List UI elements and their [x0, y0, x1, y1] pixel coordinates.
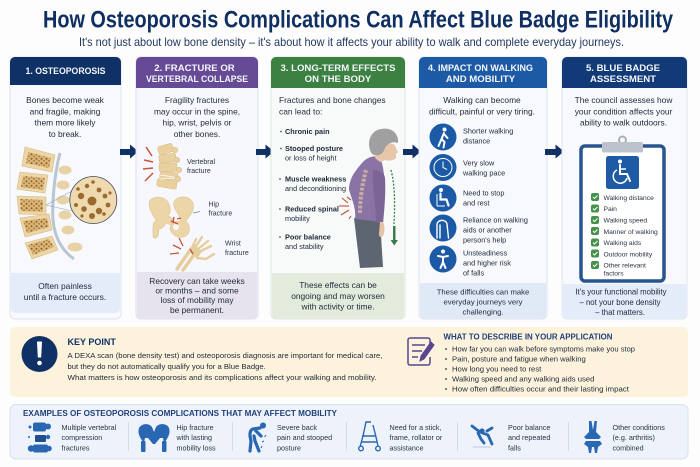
text: hip fracture: with lasting: [176, 433, 212, 442]
callout: these difficulties: everyday journeys very: [443, 298, 523, 306]
callout: functional mobility: – not your bone density: [579, 298, 661, 307]
icon: knee joint: [584, 421, 602, 453]
panel: 1. osteoporosis: [10, 57, 121, 319]
text: multiple vertebral: fractures: [62, 444, 90, 452]
text: reliance on walking aids: [463, 216, 528, 244]
list: effects: [279, 127, 346, 251]
text: key point body: A DEXA scan (bone density test) and osteoporosis diagnosis are important for medical care,: [68, 351, 383, 360]
list: what to describe: How far you can walk before symptoms make you stop: [452, 344, 635, 354]
heading: blue badge assessment: [562, 57, 687, 88]
text: other conditions: Other conditions: [612, 423, 665, 432]
panel: 4. impact on walking: [419, 57, 547, 319]
text: severe back pain: pain and stooped: [277, 433, 332, 442]
heading: what to describe: WHAT TO DESCRIBE IN YOUR APPLICATION: [444, 332, 613, 342]
text: walking can become: difficult, painful or very tiring.: [429, 106, 535, 116]
list: what to describe: How long you need to rest: [452, 364, 542, 374]
text: multiple vertebral: [62, 423, 117, 452]
illustration: wrist fracture: Wrist: [225, 240, 241, 248]
heading: impact on walking: [419, 57, 547, 88]
text: intro: can lead to:: [279, 106, 322, 116]
text: reliance on walking aids: person's help: [463, 236, 506, 244]
text: need to stop: Need to stop: [463, 188, 504, 198]
arrow: 1 to 2: [120, 144, 138, 158]
text: need for a stick: frame, rollator or: [390, 433, 443, 442]
illustration: spine with magnified bone: [17, 147, 117, 259]
panel: examples of complications: [10, 404, 688, 459]
list: what to describe: How often difficulties occur and their lasting impact: [452, 384, 630, 394]
text: need for a stick: Need for a stick,: [390, 423, 441, 432]
icon: vertebral compression: [28, 422, 52, 452]
callout: functional mobility: It's your functional mobility: [575, 288, 667, 296]
text: unsteadiness: of falls: [463, 268, 484, 278]
heading: long-term effects: 3. LONG-TERM EFFECTS: [280, 63, 396, 74]
text: poor balance: [508, 423, 550, 452]
panel: key point: [10, 327, 688, 397]
text: bones become weak: them more likely: [35, 118, 96, 128]
text: severe back pain: [277, 423, 332, 452]
list: effects: Stooped posture: [285, 144, 343, 153]
list: effects: Chronic pain: [285, 127, 330, 136]
text: very slow: [462, 158, 505, 178]
text: bones become weak: Bones become weak: [26, 95, 105, 105]
heading: impact on walking: AND MOBILITY: [446, 74, 516, 85]
text: fragility fractures: [154, 95, 240, 139]
checklist: Outdoor mobility: [604, 252, 653, 258]
list: what to describe: Pain, posture and fatigue when walking: [452, 354, 586, 364]
checklist: Manner of walking: [604, 229, 658, 236]
illustration: wrist fracture: [170, 237, 249, 270]
arrow: 2 to 3: [256, 144, 274, 158]
text: bones become weak: and fragile, making: [30, 106, 101, 116]
illustration: older woman with stooped posture: [339, 129, 398, 268]
list: effects: mobility: [285, 214, 310, 223]
illustration: wrist fracture: fracture: [225, 250, 249, 257]
checklist: [591, 193, 658, 278]
callout: recovery: or months – and some: [155, 286, 239, 296]
heading: osteoporosis: [10, 57, 121, 85]
text: intro: Fractures and bone changes: [279, 95, 386, 105]
text: bones become weak: [26, 95, 105, 139]
heading: long-term effects: ON THE BODY: [305, 74, 372, 85]
callout: recovery: loss of mobility may: [160, 295, 234, 305]
arrow: 4 to 5: [545, 144, 564, 158]
callout: often painless: Often painless: [38, 281, 92, 291]
heading: examples: EXAMPLES OF OSTEOPOROSIS COMPLICATIONS THAT MAY AFFECT MOBILITY: [23, 409, 338, 418]
icon: unsteady person: [430, 246, 456, 272]
text: walking can become: [429, 95, 535, 116]
subtitle: It's not just about low bone density – it's about how it affects your ability to walk and complete everyday journeys.: [79, 35, 624, 49]
text: the council assesses: The council assesses how: [575, 95, 673, 105]
text: need to stop: [463, 188, 504, 208]
heading: long-term effects: [271, 57, 405, 88]
text: hip fracture: [176, 423, 216, 452]
text: shorter walking: [463, 126, 513, 146]
text: other conditions: [612, 423, 665, 452]
text: need for a stick: [390, 423, 443, 452]
heading: impact on walking: 4. IMPACT ON WALKING: [428, 63, 533, 74]
text: the council assesses: ability to walk outdoors.: [580, 118, 667, 128]
text: need to stop: and rest: [463, 198, 489, 208]
text: hip fracture: mobility loss: [176, 444, 216, 452]
panel: 2. fracture: [136, 57, 258, 319]
callout: recovery: be permanent.: [170, 305, 224, 315]
list: effects: or loss of height: [285, 154, 337, 162]
text: key point body: What matters is how osteoporosis and its complications affect your walking and mobility.: [68, 373, 376, 382]
callout: recovery: [137, 272, 257, 319]
heading: blue badge assessment: ASSESSMENT: [590, 74, 656, 85]
callout: these effects: with activity or time.: [300, 302, 375, 312]
heading: fracture or vertebral collapse: 2. FRACTURE OR: [154, 63, 235, 74]
checklist: Pain: [604, 206, 617, 213]
text: fragility fractures: other bones.: [174, 129, 220, 139]
heading: fracture or vertebral collapse: [136, 57, 258, 88]
illustration: hip fracture: [149, 197, 232, 238]
list: effects: Muscle weakness: [285, 174, 346, 184]
text: shorter walking: Shorter walking: [463, 126, 513, 136]
illustration: vertebral fracture: [143, 143, 215, 189]
checklist: Other relevant: [604, 262, 646, 270]
callout: these difficulties: challenging.: [462, 308, 504, 316]
icon: pelvis: [138, 424, 170, 452]
icon: wheelchair symbol: [606, 156, 639, 189]
heading: fracture or vertebral collapse: VERTEBRAL COLLAPSE: [146, 74, 249, 85]
panel: 5. blue badge assessment: [562, 57, 687, 319]
callout: these difficulties: [420, 283, 546, 319]
text: fragility fractures: Fragility fractures: [165, 95, 229, 105]
icon: exclamation: [22, 336, 58, 372]
icon: walking cane: [430, 214, 456, 242]
callout: often painless: [11, 273, 120, 313]
list: what to describe: [445, 344, 635, 394]
list: effects: Reduced spinal: [285, 204, 339, 214]
list: what to describe: Walking speed and any walking aids used: [452, 374, 594, 384]
callout: functional mobility: [563, 284, 686, 319]
text: reliance on walking aids: aids or another: [463, 226, 512, 234]
checklist: Walking aids: [604, 240, 642, 247]
text: multiple vertebral: compression: [62, 433, 102, 442]
text: multiple vertebral: Multiple vertebral: [62, 423, 117, 432]
text: the council assesses: [575, 95, 673, 128]
text: poor balance: falls: [508, 444, 521, 452]
text: need for a stick: assistance: [390, 444, 423, 452]
text: severe back pain: Severe back: [277, 423, 317, 432]
callout: these effects: These effects can be: [299, 280, 377, 290]
text: fragility fractures: hip, wrist, pelvis or: [163, 118, 232, 128]
text: unsteadiness: and higher risk: [463, 258, 511, 268]
heading: blue badge assessment: 5. BLUE BADGE: [586, 63, 661, 74]
text: poor balance: Poor balance: [508, 423, 550, 432]
heading: osteoporosis: 1. OSTEOPOROSIS: [26, 66, 106, 77]
illustration: vertebral fracture: fracture: [187, 168, 211, 175]
icon: walking person: [430, 124, 456, 150]
text: other conditions: (e.g. arthritis): [612, 433, 655, 442]
illustration: hip fracture: fracture: [208, 210, 232, 218]
checklist: Walking speed: [604, 218, 647, 224]
panel: 3. long-term effects: [271, 57, 405, 319]
text: key point body: but they do not automatically qualify you for a Blue Badge.: [68, 362, 266, 371]
icon: stooped person: [250, 422, 266, 451]
callout: these effects: [272, 273, 404, 319]
callout: often painless: until a fracture occurs.: [24, 292, 106, 302]
text: unsteadiness: [463, 248, 511, 278]
text: fragility fractures: may occur in the spine,: [154, 106, 240, 116]
illustration: hip fracture: Hip: [208, 202, 219, 208]
icon: seated person: [430, 184, 456, 212]
illustration: vertebral fracture: Vertebral: [187, 159, 215, 166]
heading: key point: KEY POINT: [68, 337, 116, 347]
illustration: clipboard checklist: [581, 136, 664, 281]
callout: these difficulties: These difficulties can make: [437, 288, 529, 296]
arrow: 3 to 4: [403, 144, 421, 158]
checklist: factors: [604, 270, 624, 278]
text: hip fracture: Hip fracture: [176, 423, 214, 432]
text: very slow: Very slow: [463, 158, 495, 168]
text: intro: [279, 95, 386, 116]
list: effects: Poor balance: [285, 232, 331, 242]
list: effects: and deconditioning: [285, 184, 346, 193]
callout: recovery: Recovery can take weeks: [149, 276, 245, 286]
text: severe back pain: posture: [277, 444, 301, 452]
icon: falling person: [472, 426, 492, 447]
text: shorter walking: distance: [463, 136, 490, 146]
text: key point body: [68, 351, 383, 382]
text: poor balance: and repeated: [508, 433, 550, 442]
list: effects: and stability: [285, 242, 324, 251]
icon: rollator: [359, 422, 380, 451]
checklist: Walking distance: [604, 195, 654, 202]
icon: document and pen: [408, 338, 434, 365]
text: walking can become: Walking can become: [443, 95, 521, 105]
text: very slow: walking pace: [462, 168, 505, 178]
text: the council assesses: your condition affects your: [575, 106, 673, 116]
callout: functional mobility: – that matters.: [595, 308, 645, 317]
callout: these effects: ongoing and may worsen: [291, 291, 385, 301]
text: reliance on walking aids: Reliance on walking: [463, 216, 528, 224]
text: other conditions: combined: [612, 444, 644, 452]
text: unsteadiness: Unsteadiness: [463, 248, 508, 258]
text: bones become weak: to break.: [49, 129, 81, 139]
icon: clock: [430, 154, 456, 181]
